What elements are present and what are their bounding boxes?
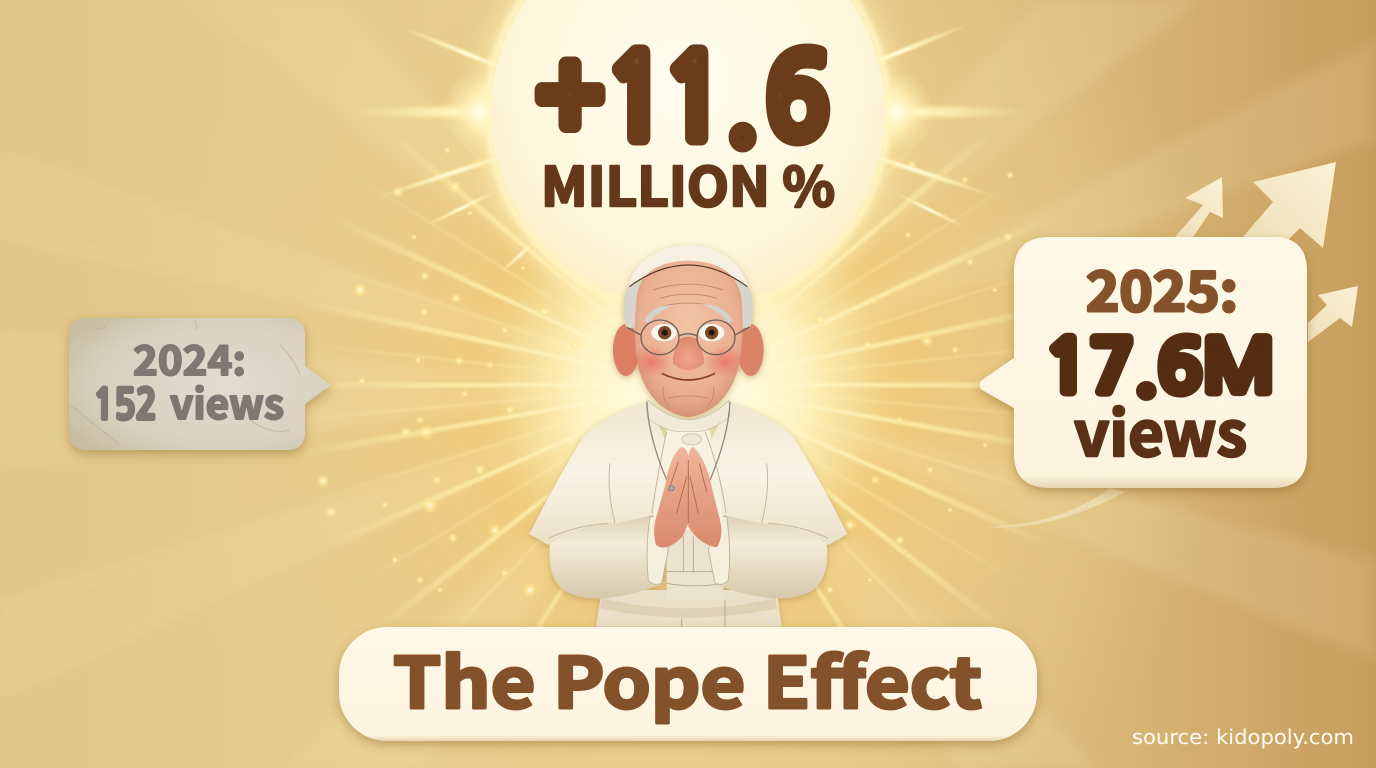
- sparkles: [316, 146, 1014, 598]
- value: 17.6M: [1044, 331, 1275, 403]
- collar: [648, 400, 730, 432]
- mouth: [662, 373, 715, 380]
- eyes: [651, 324, 677, 341]
- zucchetto: [628, 244, 748, 287]
- eyebrows: [644, 304, 733, 323]
- wrinkles: [653, 284, 723, 306]
- views: views: [170, 371, 284, 431]
- glasses: [627, 320, 750, 355]
- headline unit: MILLION %: [541, 143, 835, 222]
- light rays: [180, 53, 1200, 724]
- year: 2025:: [1086, 247, 1238, 327]
- speech bubble: [980, 237, 1307, 488]
- title text: The Pope Effect: [393, 628, 982, 729]
- stone cracks: [70, 320, 300, 445]
- large arrow: [1243, 162, 1336, 248]
- middle arrow: [1175, 177, 1223, 237]
- swoosh: [985, 488, 1125, 528]
- ears: [613, 324, 639, 376]
- pill background: [339, 627, 1037, 741]
- robe lower: [596, 590, 782, 627]
- radiant circle with headline: [348, 0, 1028, 320]
- zucchetto edge: [629, 265, 747, 287]
- button: [682, 434, 702, 445]
- left callout: 2024: [69, 318, 331, 450]
- right callout: 2025: [980, 237, 1307, 488]
- year: 2024:: [133, 327, 246, 387]
- views: views: [1074, 384, 1247, 474]
- neck and head: [635, 261, 743, 417]
- chest: [653, 430, 723, 530]
- cape hem lines: [548, 463, 828, 538]
- headline number: +11.6: [535, 41, 830, 156]
- hands: [654, 447, 721, 547]
- title pill: [339, 627, 1037, 741]
- cuffs: [647, 517, 730, 584]
- chain: [647, 402, 730, 480]
- growth arrows: [985, 162, 1358, 528]
- pope character: [529, 244, 847, 627]
- cape: [529, 402, 667, 545]
- hair: [623, 280, 753, 328]
- cheeks: [631, 345, 672, 378]
- circle glow and flares: [348, 0, 1028, 320]
- left sleeve: [549, 515, 668, 599]
- small arrow: [1308, 286, 1358, 342]
- views: 152: [93, 386, 157, 426]
- stone bubble: [69, 318, 331, 450]
- nose: [673, 337, 704, 370]
- source credit: source: kidopoly.com: [1132, 725, 1354, 749]
- right sleeve: [708, 515, 827, 599]
